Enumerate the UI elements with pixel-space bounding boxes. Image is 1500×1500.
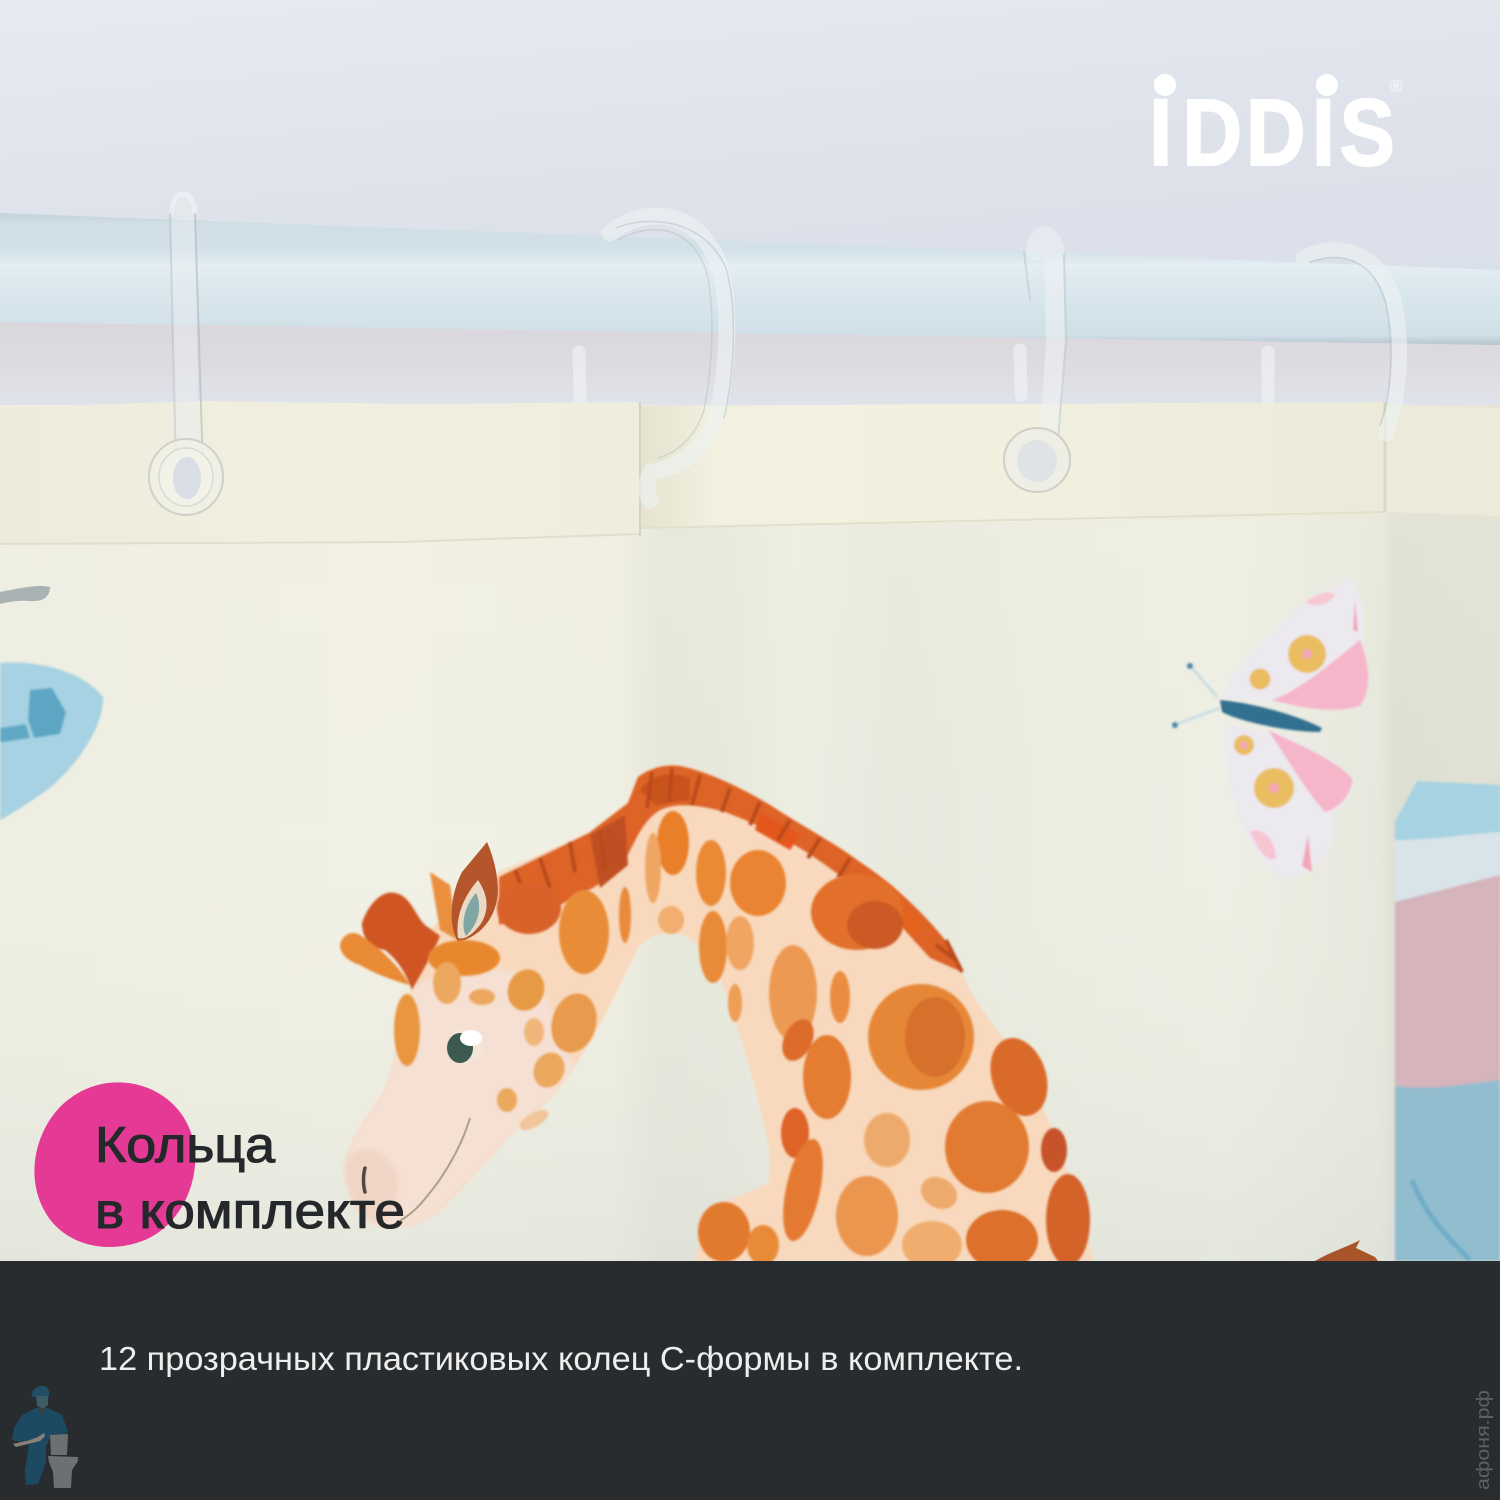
heading bbox=[95, 1117, 405, 1239]
eyelet 3 bbox=[1004, 428, 1070, 492]
lower wing bbox=[1225, 725, 1353, 880]
horns bbox=[340, 872, 458, 990]
face pale area bbox=[345, 960, 574, 1228]
fabric print: giraffe bbox=[340, 765, 1094, 1270]
ring 2 on rod bbox=[579, 216, 733, 500]
pink blob accent bbox=[34, 1082, 195, 1247]
icon: plumber with toilet watermark bbox=[12, 1386, 78, 1488]
background: shadow under rod bbox=[0, 322, 1500, 410]
butterfly body bbox=[1220, 700, 1322, 732]
fabric print: butterfly bbox=[1172, 578, 1368, 880]
hidden ring end bbox=[1262, 352, 1274, 398]
lower wing pink bbox=[1268, 730, 1353, 812]
giraffe body silhouette bbox=[345, 765, 1094, 1261]
iddis logo: ® bbox=[1390, 77, 1403, 96]
background photo: wall bbox=[0, 0, 1500, 420]
hidden ring end bbox=[1020, 350, 1021, 395]
ring 3 on rod bbox=[1004, 236, 1070, 492]
fabric print: pastel panel at right bbox=[1395, 781, 1500, 1261]
eye bbox=[447, 1029, 483, 1063]
fabric print: blue shape at left edge bbox=[0, 662, 103, 820]
mane bbox=[499, 765, 962, 972]
heading: Кольца bbox=[95, 1117, 275, 1173]
ring 1 on rod bbox=[149, 194, 223, 515]
curtain top band, left flap bbox=[0, 401, 640, 544]
giraffe spots bbox=[394, 811, 1090, 1270]
upper wing pink bbox=[1272, 640, 1368, 710]
curtain top band, right section bbox=[640, 402, 1500, 528]
description text: 12 прозрачных пластиковых колец С-формы в комплекте. bbox=[99, 1340, 1023, 1377]
ear bbox=[452, 842, 498, 942]
eyelet 1 bbox=[149, 439, 223, 515]
shower rod bbox=[0, 213, 1500, 345]
ring 4 on rod bbox=[1268, 250, 1400, 434]
fabric print: grey feather fragment bbox=[0, 586, 50, 604]
plumber figure bbox=[12, 1386, 68, 1485]
antennae bbox=[1177, 668, 1220, 724]
heading: в комплекте bbox=[95, 1183, 405, 1239]
mouth and nostril bbox=[364, 1118, 470, 1222]
hidden ring end bbox=[579, 352, 580, 398]
toilet bbox=[48, 1434, 78, 1488]
iddis logo: IDDIS bbox=[1149, 79, 1395, 185]
wing dots bbox=[1234, 635, 1326, 808]
upper wing bbox=[1220, 578, 1368, 710]
fabric print: brown fragment bbox=[1315, 1240, 1378, 1261]
curtain fabric bbox=[0, 401, 1500, 1265]
bottom dark bar bbox=[0, 1261, 1500, 1500]
watermark: afonya.rf: афоня.рф bbox=[1473, 1390, 1493, 1490]
